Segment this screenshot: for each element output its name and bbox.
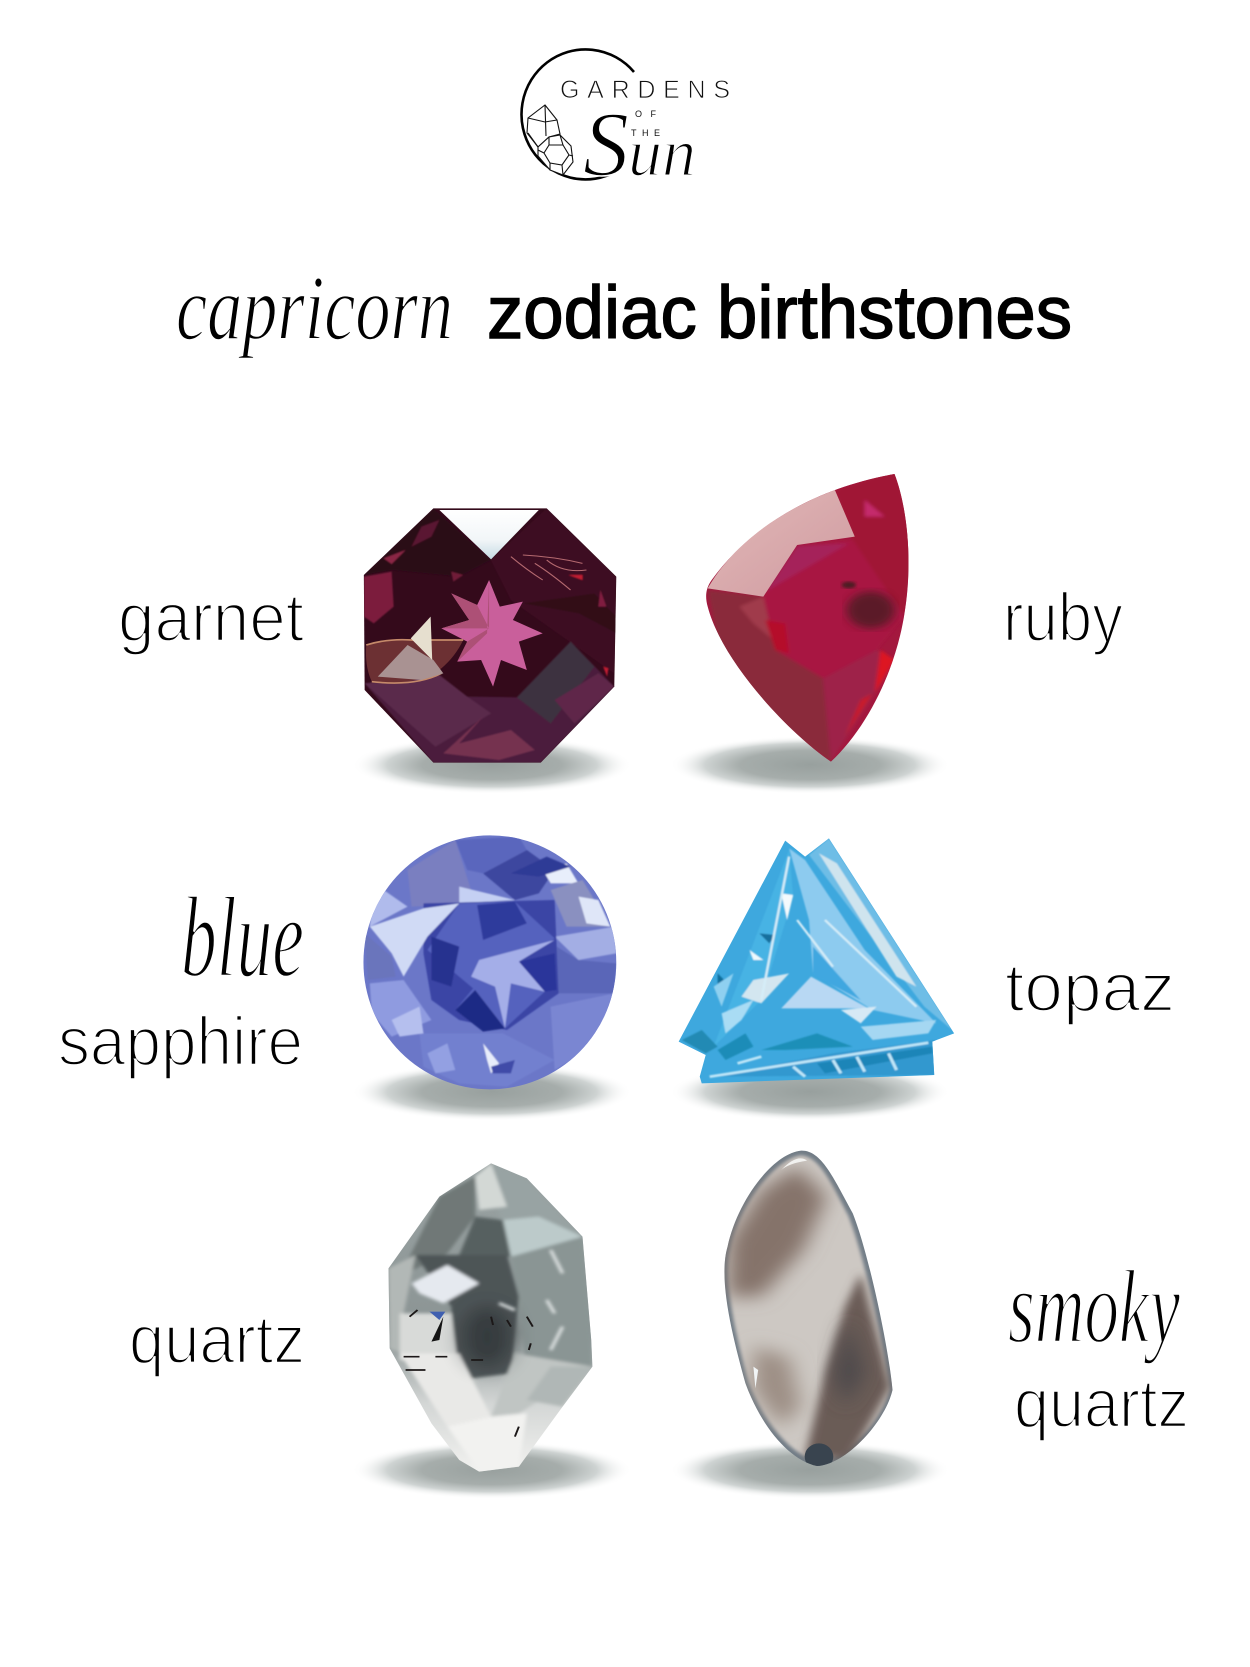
logo circle [522,49,634,179]
icon: crystals [527,105,573,175]
gem: herkimer quartz [388,1163,592,1472]
label: quartz (smoky): quartz [1014,1365,1189,1442]
title script word: capricorn [176,257,453,359]
label: topaz: topaz [1005,949,1175,1026]
logo text: gardens: GARDENS [560,76,730,104]
gem: topaz [679,838,954,1083]
logo: Gardens of the Sun [522,49,730,195]
title [176,257,1072,359]
garnet star [441,580,543,687]
title sans words: zodiac birthstones [487,271,1072,354]
garnet inclusion [366,617,463,683]
logo text: of: OF [635,109,656,119]
logo text: the: THE [631,128,660,138]
infographic canvas [61,48,1185,1496]
label: garnet: garnet [118,579,304,656]
label: blue: blue [181,874,304,1001]
gem: garnet [364,508,616,763]
gem: ruby [706,470,912,762]
ruby highlight facet [708,490,855,597]
gem: blue sapphire [363,835,616,1089]
label: quartz: quartz [129,1301,305,1378]
logo text: sun: Sun [583,93,696,195]
shadows under the stones [352,736,950,1499]
label: ruby: ruby [1003,579,1123,656]
label: sapphire: sapphire [58,1003,303,1080]
gem: smoky quartz [724,1151,893,1470]
